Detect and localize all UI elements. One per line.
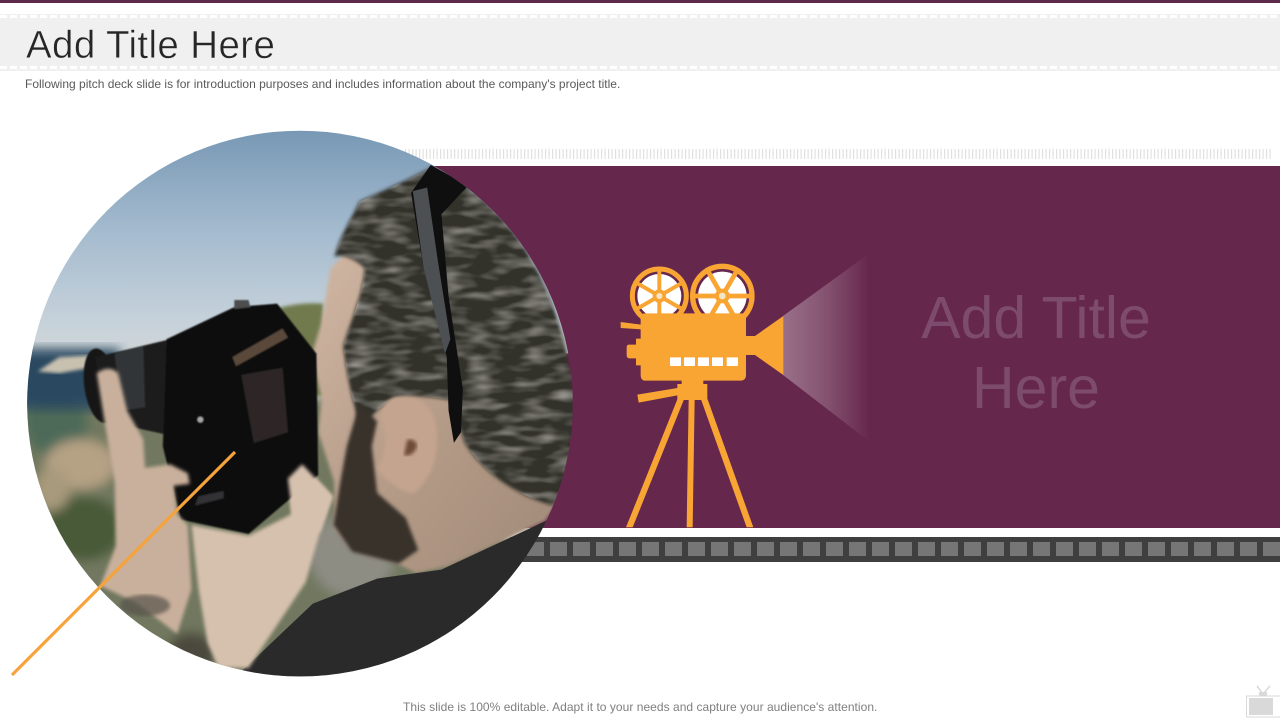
sky [20,125,577,354]
right film reel [693,266,752,326]
title: Add Title Here [26,24,275,67]
top accent bar [0,0,1280,3]
tripod head [637,380,707,403]
camera [79,300,318,534]
camera body [627,313,783,381]
footer note: This slide is 100% editable. Adapt it to your needs and capture your audience's attention. [403,700,877,714]
icon: film camera on tripod [621,266,783,527]
island [38,355,90,373]
title band [0,14,1280,71]
beard [334,404,418,564]
subtitle text: Following pitch deck slide is for introduction purposes and includes information about the company's project title. [25,77,620,91]
sunglasses arm [411,165,468,443]
shirt [242,520,546,676]
side knob [621,322,641,329]
accent diagonal line [12,452,235,675]
thumb over camera [288,464,332,532]
hair [334,166,577,505]
film window [670,357,738,366]
icon: tv watermark [1246,686,1280,717]
sea [6,349,120,409]
forearm tattoo [120,595,170,616]
foliage background [27,392,512,676]
left hand holding lens [97,369,191,634]
photo: photographer with camera in circle [6,125,577,696]
right hand supporting camera [191,464,332,668]
neck and face [311,241,563,573]
ticked strip above panel [405,149,1271,159]
film strip [510,537,1280,562]
projector light beam [783,253,870,442]
tripod legs [626,399,753,527]
panel: purple banner [420,166,1280,528]
banner heading: Add Title Here [921,285,1151,420]
left film reel [632,269,686,323]
distant hill [275,303,324,396]
ear [377,397,437,493]
